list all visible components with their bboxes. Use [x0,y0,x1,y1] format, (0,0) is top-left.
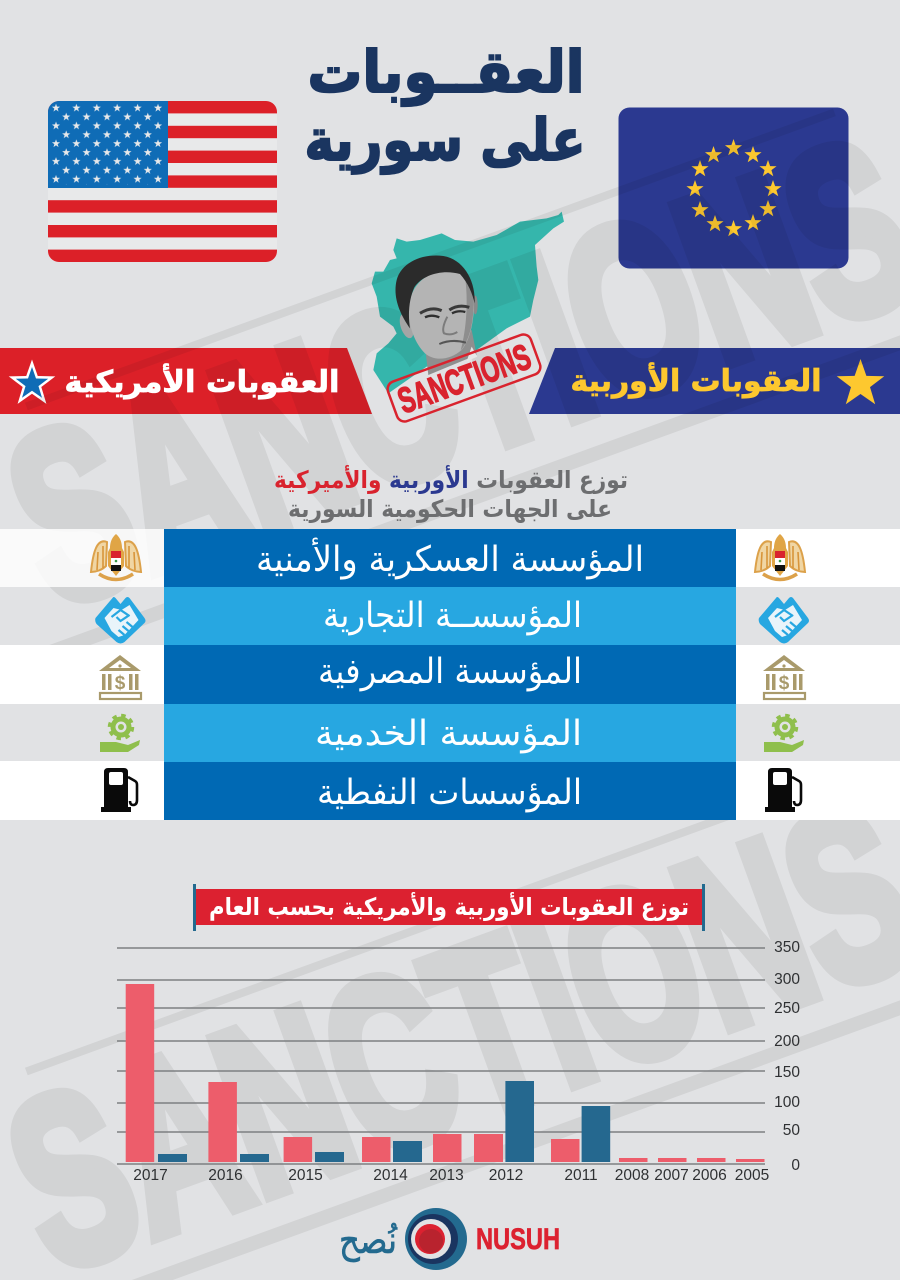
icon: left gear and hand [100,716,140,752]
x axis labels: 2008 [615,1167,649,1184]
icon: left emblem [91,534,141,580]
x axis labels: 2014 [373,1167,408,1184]
stamp: SANCTIONS: SANCTIONS [392,336,536,421]
icon: right bank [763,655,805,699]
banner: American sanctions [0,348,372,414]
icon: right handshake [759,597,809,644]
y axis labels: 200 [774,1033,800,1050]
chart heading: توزع العقوبات الأوربية والأمريكية بحسب العام [209,892,689,921]
subheading [274,465,628,523]
icon: US flag [48,101,277,262]
banner text: American sanctions: العقوبات الأمريكية [64,363,340,400]
y axis labels: 50 [783,1122,800,1139]
x axis labels [133,1167,769,1184]
icon: left bank [99,655,141,699]
banner text: European sanctions: العقوبات الأوربية [570,362,822,399]
icon: right gear and hand [764,716,804,752]
panel: government sectors table [0,529,900,820]
stamp: SANCTIONS [385,332,543,424]
y axis labels: 350 [774,939,800,956]
logo: Nusuh: NUSUH [476,1223,560,1256]
y axis labels: 150 [774,1064,800,1081]
bar chart [117,939,800,1184]
x axis labels: 2013 [429,1167,464,1184]
portrait [395,256,478,375]
series: European [126,984,764,1162]
y axis labels: 100 [774,1094,800,1111]
y axis labels: 0 [791,1157,800,1174]
icon: right emblem [755,534,805,580]
map of Syria [372,212,564,393]
y axis labels: 250 [774,1000,800,1017]
icon: blue star [9,360,55,404]
y axis labels: 300 [774,971,800,988]
icon: EU flag [618,108,848,268]
x axis labels: 2015 [288,1167,323,1184]
row labels [256,537,644,813]
icon: left fuel pump [101,768,137,812]
row labels: المؤسسة الخدمية [315,714,582,754]
subheading: توزع العقوبات الأوربية والأميركية [274,465,628,494]
row labels: المؤسســة التجارية [323,596,582,636]
x axis labels: 2017 [133,1167,168,1184]
x axis labels: 2006 [692,1167,727,1184]
row labels: المؤسسة العسكرية والأمنية [256,537,644,580]
x axis labels: 2011 [564,1167,598,1184]
icon: left handshake [95,597,146,644]
banner: European sanctions [529,348,900,414]
icon: right fuel pump [765,768,801,812]
icon: yellow star [837,359,884,404]
logo: Nusuh: نُصح [339,1218,397,1263]
title: على سورية [304,106,586,175]
logo: Nusuh [339,1208,560,1270]
subheading: على الجهات الحكومية السورية [288,495,612,523]
x axis labels: 2012 [489,1167,523,1184]
x axis labels: 2005 [735,1167,769,1184]
title: العقــوبات [308,38,584,107]
title [304,38,586,175]
chart heading [193,884,705,931]
series: American [158,1081,610,1162]
row labels: المؤسسات النفطية [317,773,582,813]
x axis labels: 2007 [654,1167,689,1184]
y axis labels [774,939,800,1174]
row labels: المؤسسة المصرفية [318,652,582,692]
x axis labels: 2016 [208,1167,243,1184]
